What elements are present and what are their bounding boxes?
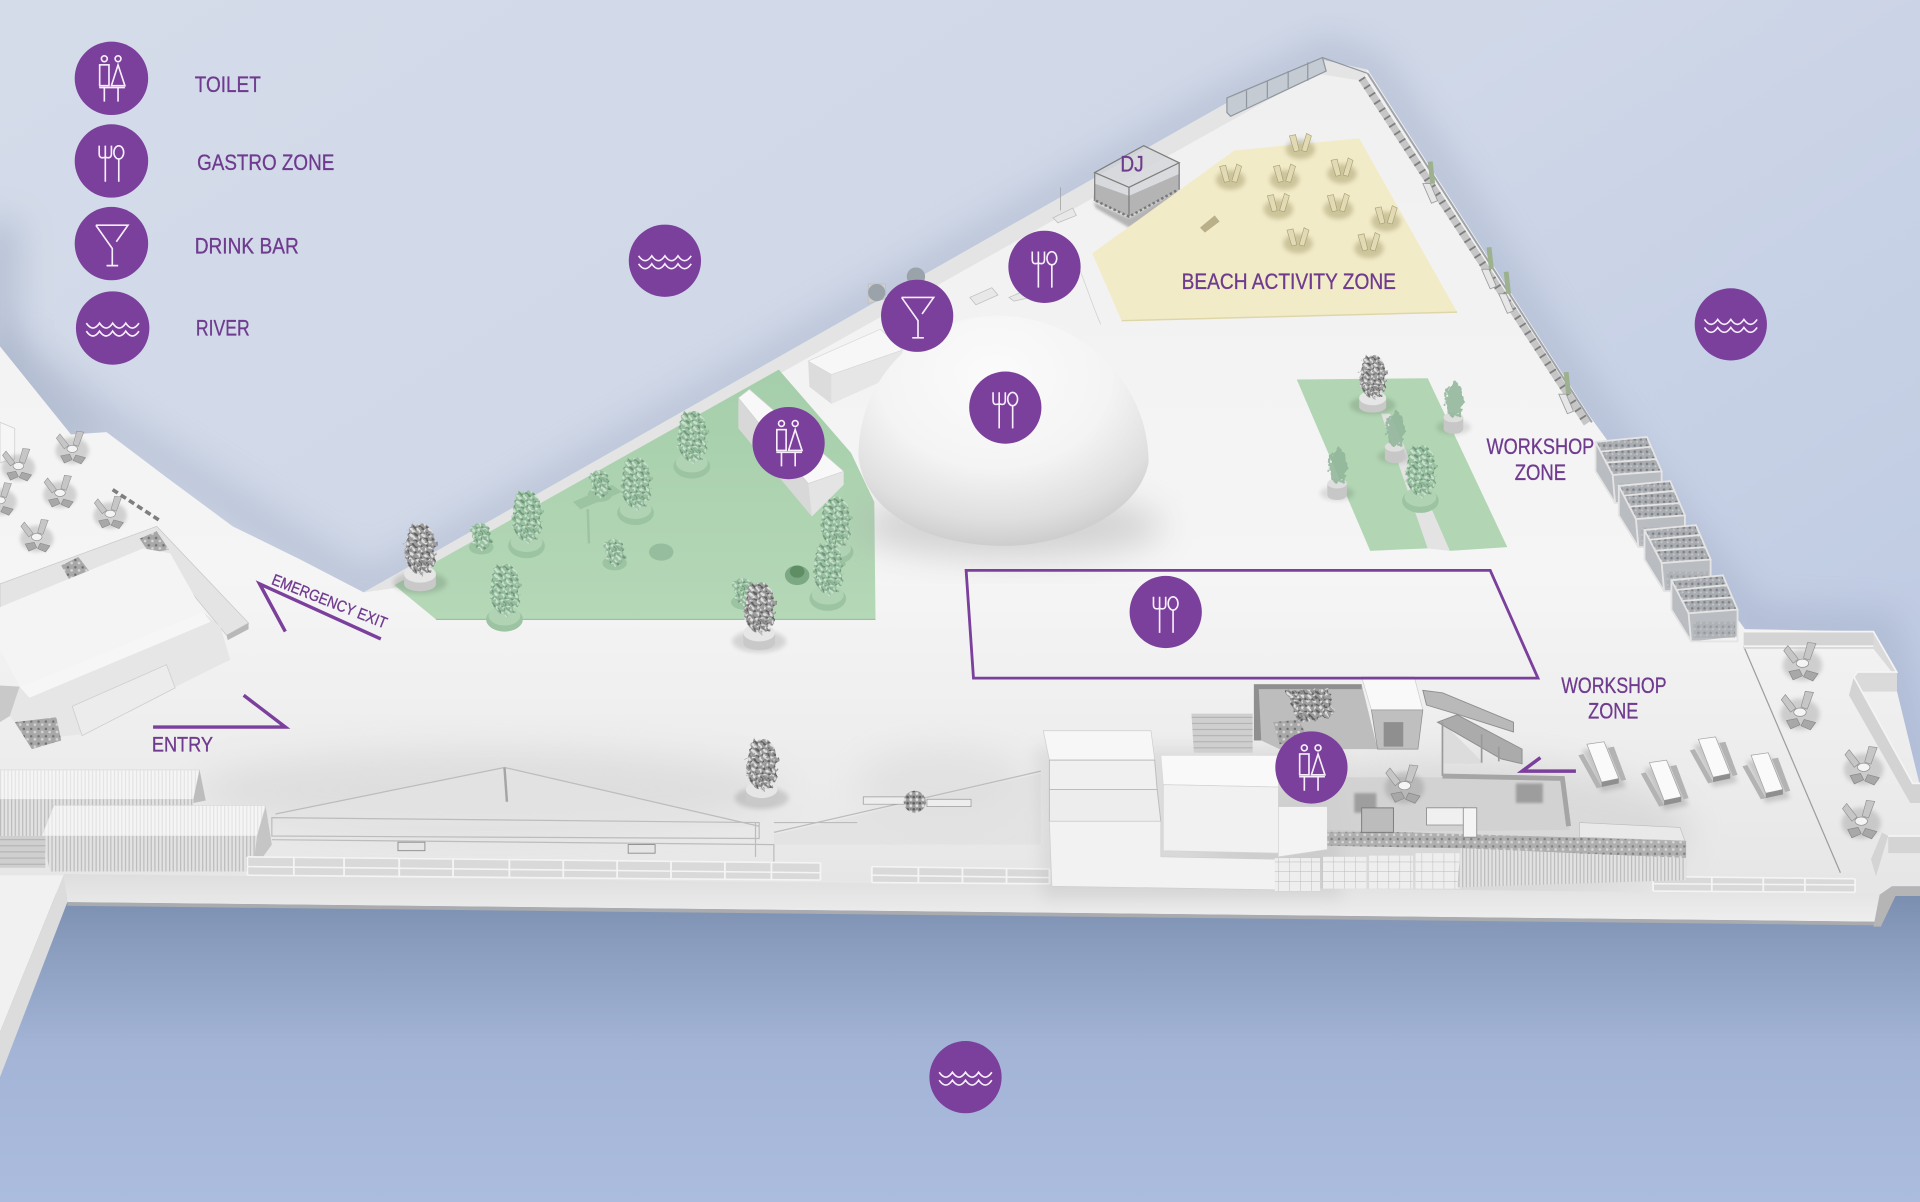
left terrace with seating xyxy=(0,422,159,552)
bar building beside dome xyxy=(808,329,902,404)
river background, lower water xyxy=(0,894,1920,1202)
courtyard with stairs and seating xyxy=(1191,677,1570,837)
arrow: workshop zone xyxy=(1522,758,1576,771)
bottom railings xyxy=(247,842,1855,892)
marker: gastro zone xyxy=(1130,576,1202,648)
label: beach activity zone: BEACH ACTIVITY ZONE xyxy=(1182,269,1396,294)
legend: river label: RIVER xyxy=(196,315,250,340)
beach activity zone xyxy=(1092,133,1457,321)
legend: river icon xyxy=(76,291,149,365)
marker: gastro north xyxy=(1008,231,1081,303)
ramp structure xyxy=(272,767,1041,863)
legend: toilet icon xyxy=(75,42,148,115)
arrow: emergency exit xyxy=(260,584,381,639)
legend: toilet label: TOILET xyxy=(195,72,261,97)
gastro zone outline xyxy=(966,570,1538,678)
left building xyxy=(0,526,249,749)
workshop cages xyxy=(1596,437,1738,641)
picnic tables xyxy=(1578,737,1790,810)
legend: drink icon xyxy=(75,207,148,280)
label: workshop zone lower: WORKSHOP xyxy=(1561,673,1667,698)
DJ stage xyxy=(1093,146,1180,228)
legend xyxy=(75,42,334,365)
containers bottom left xyxy=(0,770,272,872)
marker: drink bar xyxy=(881,280,953,352)
label: DJ: DJ xyxy=(1120,151,1144,176)
toilet block in park xyxy=(738,389,844,517)
marker: river east xyxy=(1695,288,1767,360)
site ground plane xyxy=(0,60,1920,922)
marker: river south xyxy=(929,1041,1002,1113)
label: workshop zone lower: ZONE xyxy=(1588,699,1638,724)
label: workshop zone upper: ZONE xyxy=(1515,460,1566,485)
legend: drink label: DRINK BAR xyxy=(195,233,299,258)
small pavilion line near gastro xyxy=(868,187,1101,324)
dome xyxy=(857,316,1163,558)
marker: river north xyxy=(629,225,701,297)
solitary trees on quay xyxy=(735,738,971,813)
label: emergency exit: EMERGENCY EXIT xyxy=(269,572,390,633)
legend: gastro icon xyxy=(75,124,148,198)
marker: toilet courtyard xyxy=(1275,731,1348,804)
label: entry: ENTRY xyxy=(152,734,213,757)
quay front wall xyxy=(64,874,1920,927)
legend: gastro label: GASTRO ZONE xyxy=(197,150,334,175)
marker: toilet park xyxy=(752,407,825,479)
vegetable strips green zone xyxy=(1297,354,1507,551)
marker: gastro dome xyxy=(969,371,1041,444)
north-east fence xyxy=(1227,58,1592,424)
left pier xyxy=(0,875,67,1077)
river background, upper water xyxy=(0,0,1920,930)
arrow: entry xyxy=(153,695,285,727)
lower right terrace xyxy=(1744,632,1920,876)
green park zone xyxy=(393,370,876,652)
label: workshop zone upper: WORKSHOP xyxy=(1487,434,1594,459)
center warehouse boxes xyxy=(1035,731,1686,900)
